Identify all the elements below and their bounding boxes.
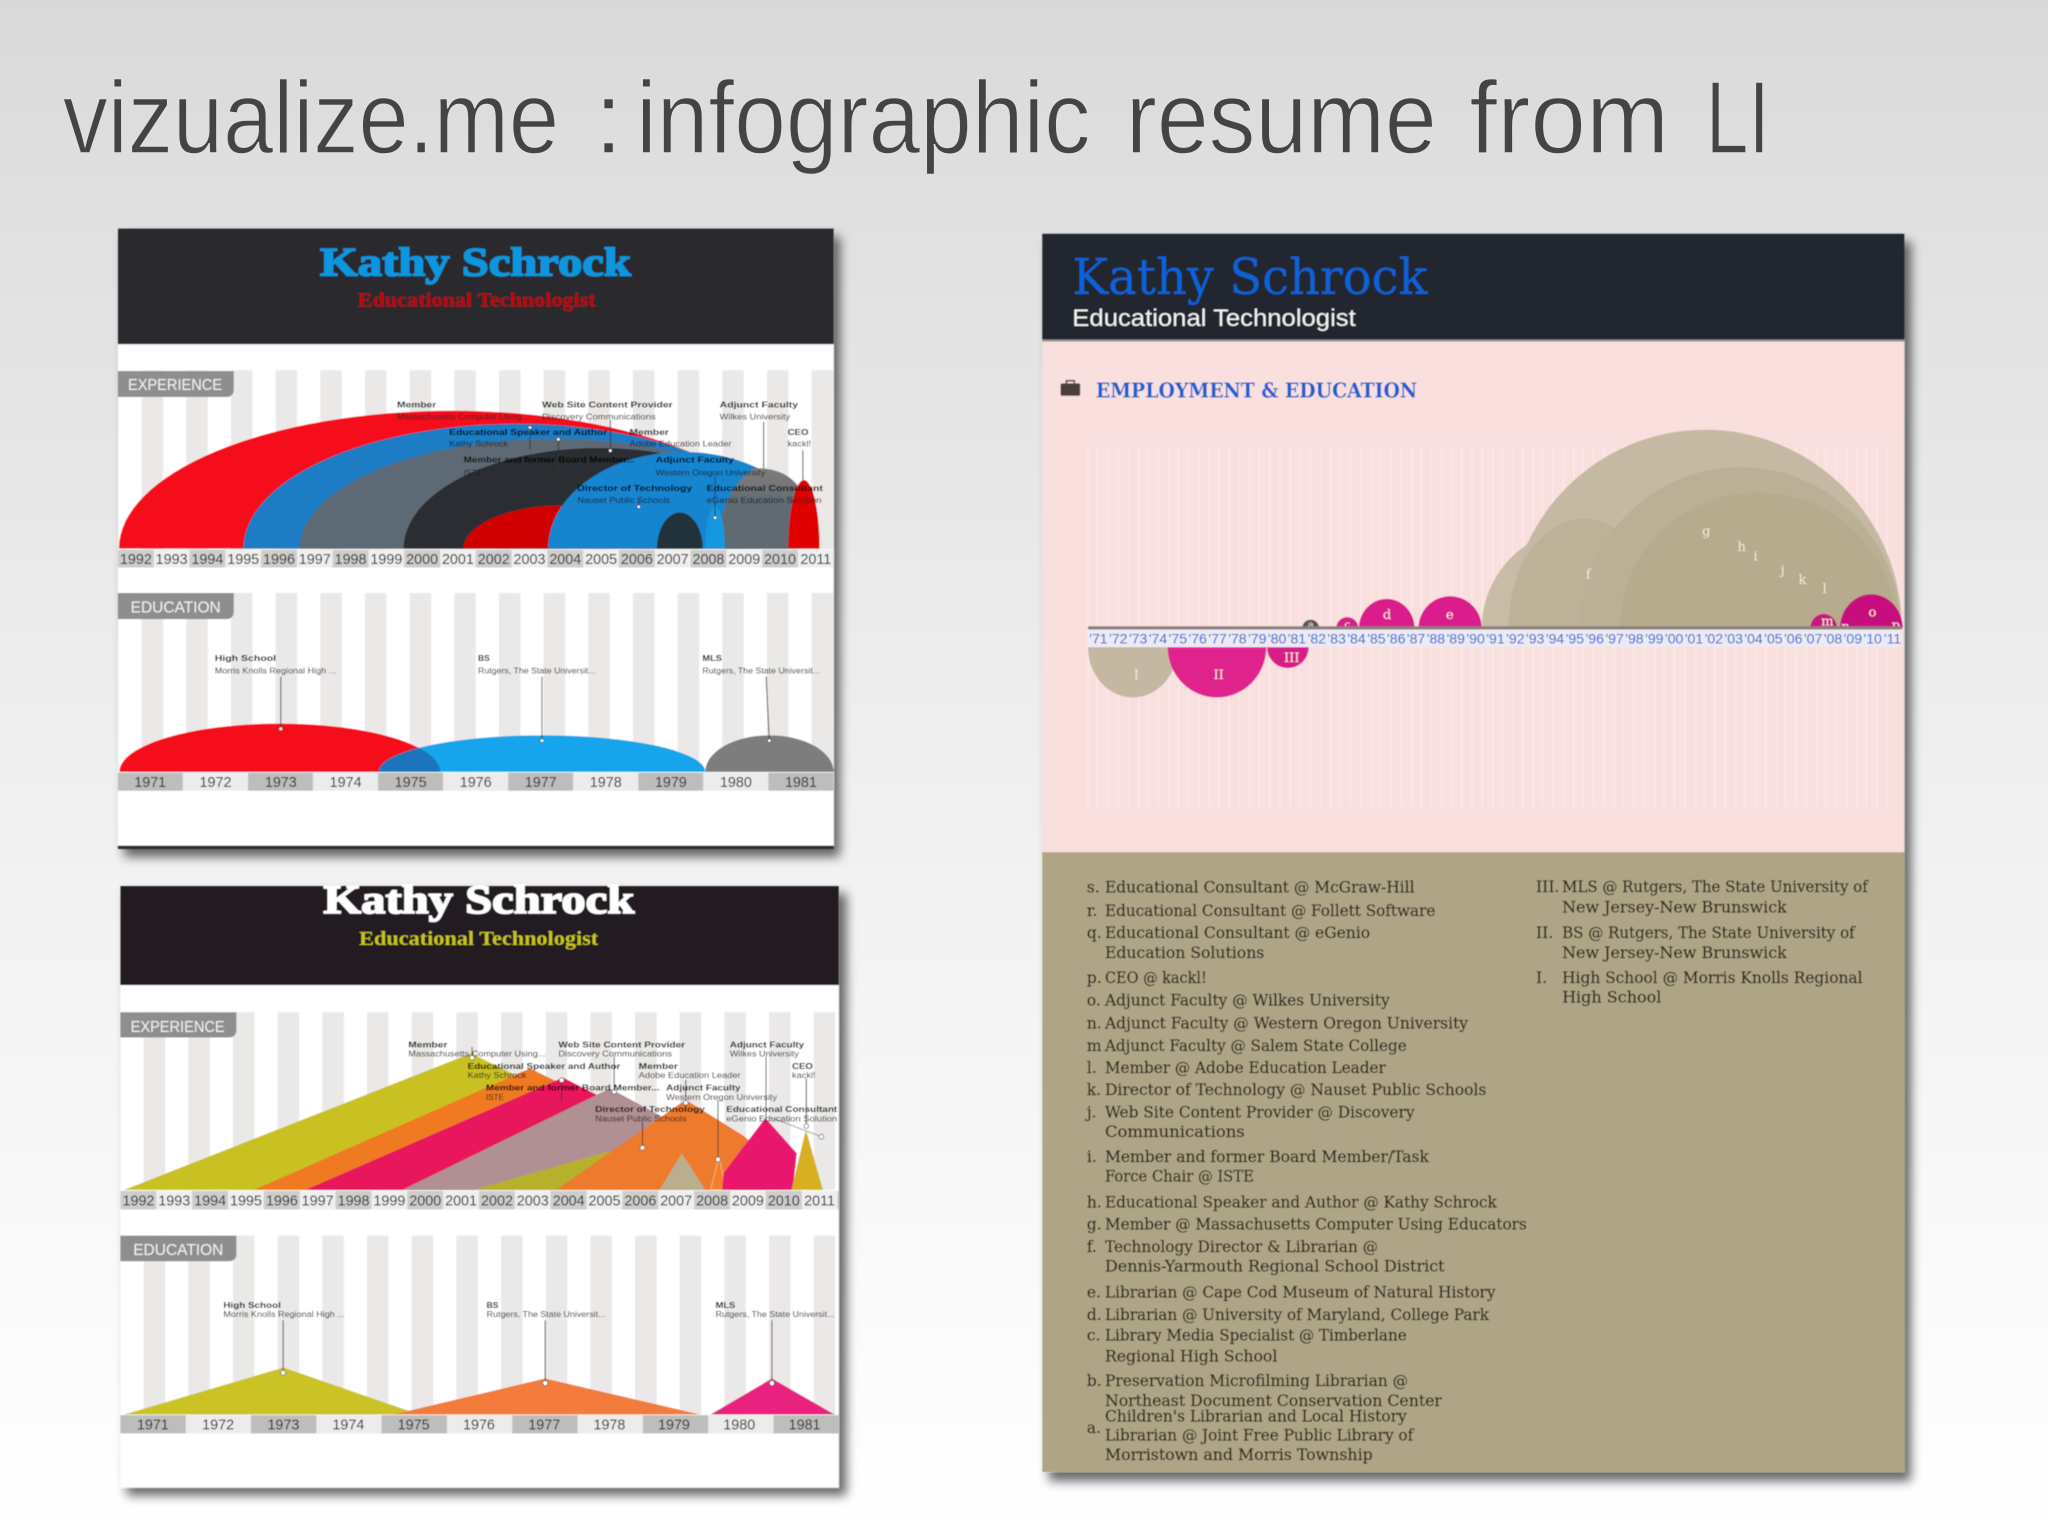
legend: employment list: Educational Consultant @ McGraw-Hill — [1105, 878, 1415, 897]
axis: experience years: 1998 — [338, 1194, 370, 1210]
legend: employment list: j. — [1085, 1102, 1097, 1121]
callouts: experience triangles: CEO — [792, 1061, 814, 1071]
axis: year timeline: '83 — [1327, 631, 1346, 647]
axis: year timeline: '08 — [1824, 631, 1842, 647]
tag: experience: EXPERIENCE — [128, 377, 222, 394]
callouts: experience arcs: ISTE — [464, 468, 483, 477]
header: arcs resume — [118, 229, 834, 344]
axis: experience years: 2000 — [409, 1194, 441, 1210]
callouts: education arcs: BS — [478, 653, 490, 663]
axis: year timeline: '95 — [1566, 631, 1584, 647]
chart: employment bubbles: f — [1586, 568, 1592, 583]
callouts: experience triangles: Western Oregon University — [666, 1093, 778, 1102]
legend: employment list: Librarian @ Cape Cod Museum of Natural History — [1105, 1283, 1496, 1302]
legend: employment list: p. — [1087, 968, 1102, 987]
legend: education list: III. — [1536, 877, 1560, 896]
chart: employment bubbles: e — [1446, 608, 1454, 623]
callouts: education triangles — [223, 1300, 834, 1386]
legend: education list: New Jersey-New Brunswick — [1562, 943, 1787, 962]
tag: experience: EXPERIENCE — [131, 1019, 225, 1036]
axis: year timeline: '98 — [1625, 631, 1644, 647]
axis: education years: 1971 — [134, 775, 166, 791]
axis: experience years: 1997 — [302, 1194, 334, 1210]
callouts: experience arcs: Adjunct Faculty — [720, 400, 798, 410]
tag: experience — [118, 371, 234, 397]
axis: year timeline: '81 — [1288, 631, 1306, 647]
axis: year timeline: '02 — [1705, 631, 1723, 647]
callouts: experience triangles: Adobe Education Leader — [639, 1071, 741, 1080]
tag: education: EDUCATION — [133, 1242, 223, 1259]
chart: employment bubbles: l — [1823, 582, 1827, 597]
legend: employment list: Preservation Microfilming Librarian @ — [1105, 1371, 1408, 1390]
axis: education years: 1976 — [463, 1418, 495, 1434]
year grid — [1088, 445, 1887, 807]
callouts: education arcs: Rutgers, The State Universit... — [478, 666, 596, 675]
chart: education bubbles: I — [1134, 668, 1139, 683]
axis: year timeline: '87 — [1407, 631, 1425, 647]
axis: year timeline: '93 — [1526, 631, 1545, 647]
axis: year timeline: '96 — [1586, 631, 1604, 647]
axis: education years: 1972 — [202, 1418, 234, 1434]
axis: education years: 1973 — [267, 1418, 299, 1434]
axis: experience years: 2007 — [660, 1194, 692, 1210]
axis: education years: 1981 — [785, 775, 817, 791]
legend: employment list: c. — [1087, 1326, 1100, 1345]
axis: year timeline: '84 — [1347, 631, 1366, 647]
legend: employment list: Children's Librarian and Local History — [1105, 1407, 1407, 1426]
legend: employment list: Web Site Content Provider @ Discovery — [1105, 1102, 1415, 1121]
callouts: experience triangles: Adjunct Faculty — [730, 1040, 805, 1050]
axis: year timeline: '85 — [1367, 631, 1386, 647]
legend: employment list: Member and former Board Member/Task — [1105, 1147, 1429, 1166]
legend: employment list: Dennis-Yarmouth Regional School District — [1105, 1257, 1445, 1276]
axis: year timeline: '82 — [1308, 631, 1326, 647]
axis: education years: 1978 — [593, 1418, 625, 1434]
chart: employment bubbles: m — [1821, 615, 1834, 630]
callouts: experience triangles: Wilkes University — [730, 1050, 800, 1059]
legend: employment list: Member @ Massachusetts Computer Using Educators — [1105, 1215, 1527, 1234]
axis: experience years: 1992 — [120, 552, 152, 568]
callouts: experience arcs: Educational Speaker and Author — [449, 427, 608, 437]
callouts: education triangles: High School — [223, 1300, 281, 1310]
axis: experience years: 2010 — [764, 552, 796, 568]
title: LI — [1706, 60, 1770, 175]
axis: year timeline: '79 — [1248, 631, 1267, 647]
legend: employment list: q. — [1087, 923, 1102, 942]
legend: employment list: Educational Consultant @ Follett Software — [1105, 901, 1435, 920]
callouts: experience arcs: Member and former Board Member... — [464, 454, 635, 464]
callouts: experience triangles: eGenio Education Solution — [726, 1114, 837, 1123]
legend: employment list: Education Solutions — [1105, 943, 1264, 962]
axis: experience years: 1994 — [191, 552, 223, 568]
axis: experience years: 2005 — [588, 1194, 620, 1210]
legend: employment list: Adjunct Faculty @ Wilkes University — [1104, 991, 1390, 1010]
legend: employment list: o. — [1087, 991, 1101, 1010]
callouts: experience triangles: Kathy Schrock — [468, 1071, 527, 1080]
axis: experience years: 2001 — [445, 1194, 477, 1210]
axis: year timeline: '73 — [1129, 631, 1147, 647]
axis: experience years: 2002 — [478, 552, 510, 568]
legend: employment list: k. — [1087, 1080, 1101, 1099]
callouts: experience triangles: Massachusetts Computer Using... — [408, 1050, 545, 1059]
legend: education list: MLS @ Rutgers, The State University of — [1562, 877, 1869, 896]
callouts: experience arcs: Member — [397, 400, 437, 410]
legend: employment list: m — [1087, 1036, 1102, 1055]
callouts: experience arcs: Western Oregon University — [656, 468, 766, 477]
header: triangles resume: Kathy Schrock — [323, 877, 635, 922]
axis: year timeline: '71 — [1089, 631, 1108, 647]
chart: experience triangles — [120, 1012, 839, 1190]
axis: experience years: 2006 — [624, 1194, 656, 1210]
legend: education list — [1536, 877, 1869, 1006]
callouts: education triangles: Rutgers, The State Universit... — [487, 1310, 606, 1319]
axis: year timeline: '07 — [1804, 631, 1823, 647]
axis: education years: 1975 — [398, 1418, 430, 1434]
legend: employment list: b. — [1087, 1371, 1102, 1390]
axis: year timeline: '72 — [1109, 631, 1128, 647]
callouts: experience triangles: Adjunct Faculty — [666, 1083, 741, 1093]
legend: education list: II. — [1536, 923, 1553, 942]
legend: employment list: Director of Technology @ Nauset Public Schools — [1105, 1080, 1486, 1099]
axis: experience years: 2006 — [621, 552, 653, 568]
axis: experience years: 1992 — [122, 1194, 154, 1210]
axis: experience years — [118, 550, 834, 568]
axis: experience years: 2009 — [728, 552, 760, 568]
axis: year timeline: '90 — [1466, 631, 1485, 647]
axis: year timeline: '88 — [1427, 631, 1445, 647]
legend: employment list: Regional High School — [1105, 1347, 1277, 1366]
axis: experience years: 2008 — [696, 1194, 728, 1210]
axis: experience years — [120, 1191, 839, 1210]
header: bubble resume: Kathy Schrock — [1072, 248, 1428, 306]
callouts: experience arcs: kackl! — [788, 440, 811, 449]
callouts: experience triangles — [408, 1040, 837, 1162]
callouts: experience triangles: Discovery Communications — [558, 1050, 672, 1059]
header: bubble resume — [1042, 234, 1904, 342]
axis: year timeline — [1088, 626, 1902, 647]
header: arcs resume: Educational Technologist — [358, 289, 596, 311]
chart: employment bubbles: j — [1779, 564, 1785, 579]
axis: education years: 1971 — [137, 1418, 169, 1434]
callouts: experience arcs — [397, 400, 823, 519]
chart: employment bubbles: k — [1798, 573, 1806, 588]
callouts: experience arcs: Adjunct Faculty — [656, 454, 734, 464]
panel: arcs resume — [118, 229, 840, 857]
legend: employment list: f. — [1087, 1237, 1097, 1256]
chart: education bubbles — [1088, 647, 1309, 697]
legend: employment list: Member @ Adobe Education Leader — [1105, 1058, 1386, 1077]
callouts: education triangles: BS — [487, 1300, 499, 1310]
chart: employment bubbles: n — [1841, 620, 1850, 635]
axis: experience years: 2004 — [553, 1194, 585, 1210]
axis: experience years: 2011 — [800, 552, 831, 568]
legend: employment list: l. — [1087, 1058, 1097, 1077]
legend: employment list: Librarian @ Joint Free Public Library of — [1105, 1426, 1414, 1445]
callouts: experience triangles: Member — [639, 1061, 679, 1071]
axis: experience years: 2004 — [549, 552, 581, 568]
callouts: experience arcs: Web Site Content Provider — [542, 400, 674, 410]
legend: education list: I. — [1536, 968, 1547, 987]
callouts: education arcs: High School — [215, 653, 276, 663]
callouts: experience arcs: Wilkes University — [720, 412, 791, 421]
axis: experience years: 2010 — [768, 1194, 800, 1210]
chart: education bubbles: II — [1213, 668, 1224, 683]
callouts: experience arcs: Educational Consultant — [707, 483, 823, 493]
axis: education years: 1978 — [590, 775, 622, 791]
axis: experience years: 2011 — [804, 1194, 835, 1210]
legend: employment list: a. — [1087, 1418, 1101, 1437]
tag: education: EDUCATION — [131, 600, 221, 617]
axis: education years: 1981 — [789, 1418, 821, 1434]
title: infographic — [636, 60, 1091, 175]
header: arcs resume: Kathy Schrock — [320, 240, 631, 285]
legend: employment list: Technology Director & Librarian @ — [1105, 1237, 1378, 1256]
axis: year timeline: '11 — [1884, 631, 1901, 647]
axis: experience years: 1999 — [370, 552, 402, 568]
axis: experience years: 1994 — [194, 1194, 226, 1210]
axis: education years: 1980 — [723, 1418, 755, 1434]
callouts: experience triangles: kackl! — [792, 1071, 816, 1080]
axis: year timeline: '94 — [1546, 631, 1564, 647]
axis: year timeline: '92 — [1506, 631, 1525, 647]
axis: experience years: 2007 — [657, 552, 689, 568]
axis: experience years: 2000 — [406, 552, 438, 568]
title: from — [1469, 60, 1669, 175]
title: vizualize.me — [63, 60, 559, 175]
axis: year timeline: '77 — [1208, 631, 1227, 647]
axis: education years: 1979 — [655, 775, 687, 791]
legend: employment list: Communications — [1105, 1122, 1245, 1141]
callouts: experience arcs: Member — [630, 427, 670, 437]
title: resume — [1126, 60, 1437, 175]
chart: employment bubbles: p — [1892, 619, 1900, 634]
callouts: experience triangles: Web Site Content Provider — [558, 1040, 686, 1050]
axis: year timeline: '04 — [1744, 631, 1763, 647]
legend: employment list: r. — [1087, 901, 1097, 920]
header: triangles resume: Educational Technologist — [359, 928, 598, 950]
callouts: experience arcs: Nauset Public Schools — [577, 496, 670, 505]
section heading: employment and education: EMPLOYMENT & EDUCATION — [1096, 379, 1417, 403]
axis: experience years: 1995 — [227, 552, 259, 568]
legend: education list: High School — [1562, 987, 1661, 1006]
axis: year timeline: '76 — [1189, 631, 1207, 647]
chart: employment bubbles: a — [1308, 619, 1314, 631]
callouts: experience triangles: Educational Consultant — [726, 1104, 837, 1114]
axis: education years: 1980 — [720, 775, 752, 791]
callouts: education arcs — [215, 653, 820, 742]
axis: year timeline: '74 — [1149, 631, 1167, 647]
axis: experience years: 1996 — [266, 1194, 298, 1210]
callouts: education arcs: MLS — [702, 653, 722, 663]
axis: education years: 1972 — [200, 775, 231, 791]
chart: education triangles — [120, 1236, 839, 1415]
axis: experience years: 1993 — [158, 1194, 190, 1210]
axis: education years: 1977 — [525, 775, 557, 791]
callouts: education triangles: Rutgers, The State Universit... — [716, 1310, 834, 1319]
callouts: experience triangles: Member — [408, 1040, 448, 1050]
callouts: experience arcs: eGenio Education Solution — [707, 496, 822, 505]
axis: year timeline: '97 — [1605, 631, 1624, 647]
legend: education list: High School @ Morris Knolls Regional — [1562, 968, 1863, 987]
chart: employment bubbles: c — [1344, 619, 1350, 631]
legend: employment list: Educational Speaker and Author @ Kathy Schrock — [1105, 1193, 1497, 1212]
chart: employment bubbles: i — [1753, 549, 1758, 564]
tag: experience — [120, 1012, 236, 1037]
title: : — [594, 60, 623, 175]
axis: education years: 1977 — [528, 1418, 560, 1434]
legend: employment list: h. — [1087, 1193, 1102, 1212]
axis: year timeline: '05 — [1764, 631, 1783, 647]
legend: employment list: s. — [1087, 878, 1100, 897]
axis: year timeline: '75 — [1169, 631, 1187, 647]
header: triangles resume — [120, 877, 839, 985]
legend: education list: New Jersey-New Brunswick — [1562, 897, 1787, 916]
callouts: experience arcs: Discovery Communications — [542, 412, 656, 421]
legend: employment list: e. — [1087, 1283, 1101, 1302]
axis: year timeline: '06 — [1784, 631, 1803, 647]
callouts: experience triangles: Nauset Public Schools — [595, 1114, 687, 1123]
callouts: education arcs: Rutgers, The State Universit... — [702, 666, 820, 675]
icon: briefcase — [1061, 381, 1080, 396]
legend: employment list: Educational Consultant @ eGenio — [1105, 923, 1370, 942]
legend: employment list: Northeast Document Conservation Center — [1105, 1391, 1442, 1410]
axis: year timeline: '91 — [1486, 631, 1505, 647]
legend panel — [1042, 852, 1904, 1472]
legend: education list: BS @ Rutgers, The State University of — [1562, 923, 1856, 942]
callouts: experience arcs: Massachusetts Computer Using... — [397, 412, 529, 421]
callouts: experience triangles: Member and former Board Member... — [486, 1083, 660, 1093]
tag: education — [120, 1236, 236, 1261]
callouts: experience arcs: Kathy Schrock — [449, 440, 509, 449]
chart: education arcs — [118, 593, 834, 772]
axis: education years: 1974 — [330, 775, 362, 791]
callouts: experience triangles: Educational Speaker and Author — [468, 1061, 621, 1071]
axis: experience years: 2003 — [517, 1194, 549, 1210]
callouts: experience arcs: Director of Technology — [577, 483, 693, 493]
axis: education years: 1976 — [460, 775, 492, 791]
callouts: education arcs: Morris Knolls Regional High ... — [215, 666, 336, 675]
callouts: experience triangles: ISTE — [486, 1093, 505, 1102]
tag: education — [118, 593, 234, 619]
legend: employment list: Adjunct Faculty @ Western Oregon University — [1104, 1014, 1468, 1033]
header: bubble resume: Educational Technologist — [1072, 305, 1356, 332]
panel: triangles resume — [120, 877, 846, 1496]
callouts: experience arcs: Adobe Education Leader — [630, 440, 732, 449]
chart: employment bubbles — [1302, 430, 1903, 635]
callouts: experience triangles: Director of Technology — [595, 1104, 705, 1114]
legend: employment list: i. — [1087, 1147, 1097, 1166]
legend: employment list: Librarian @ University of Maryland, College Park — [1105, 1305, 1489, 1324]
callouts: education triangles: MLS — [716, 1300, 736, 1310]
axis: experience years: 2003 — [514, 552, 545, 568]
chart: employment bubbles: d — [1383, 608, 1391, 623]
panel: bubble resume — [1042, 234, 1911, 1481]
axis: year timeline: '89 — [1447, 631, 1465, 647]
axis: education years: 1973 — [265, 775, 297, 791]
legend: employment list — [1085, 878, 1527, 1464]
legend: employment list: g. — [1087, 1215, 1102, 1234]
axis: education years: 1974 — [332, 1418, 364, 1434]
chart: employment bubbles: h — [1738, 540, 1747, 555]
axis: education years — [118, 773, 834, 791]
axis: year timeline: '00 — [1665, 631, 1684, 647]
axis: experience years: 2008 — [692, 552, 724, 568]
axis: experience years: 1999 — [373, 1194, 405, 1210]
axis: experience years: 2005 — [585, 552, 617, 568]
legend: employment list: d. — [1087, 1305, 1102, 1324]
axis: experience years: 1997 — [299, 552, 331, 568]
legend: employment list: CEO @ kackl! — [1105, 968, 1207, 987]
axis: year timeline: '78 — [1228, 631, 1247, 647]
chart: employment bubbles: g — [1702, 525, 1710, 540]
callouts: education triangles: Morris Knolls Regional High ... — [223, 1310, 345, 1319]
chart: employment bubbles: o — [1869, 605, 1877, 620]
legend: employment list: Morristown and Morris Township — [1105, 1445, 1373, 1464]
chart: education bubbles: III — [1284, 651, 1299, 666]
axis: year timeline: '03 — [1725, 631, 1743, 647]
axis: year timeline: '80 — [1268, 631, 1286, 647]
chart: experience arcs — [118, 370, 834, 549]
axis: year timeline: '10 — [1864, 631, 1882, 647]
axis: education years: 1975 — [395, 775, 427, 791]
axis: year timeline: '09 — [1844, 631, 1862, 647]
legend: employment list: Library Media Specialist @ Timberlane — [1105, 1326, 1407, 1345]
axis: experience years: 1995 — [230, 1194, 262, 1210]
axis: experience years: 2002 — [481, 1194, 513, 1210]
axis: experience years: 2009 — [732, 1194, 764, 1210]
callouts: experience arcs: CEO — [788, 427, 809, 437]
title — [63, 60, 1770, 175]
axis: experience years: 2001 — [442, 552, 474, 568]
axis: year timeline: '01 — [1685, 631, 1703, 647]
axis: education years: 1979 — [658, 1418, 690, 1434]
legend: employment list: Adjunct Faculty @ Salem State College — [1104, 1036, 1407, 1055]
axis: experience years: 1993 — [156, 552, 188, 568]
axis: experience years: 1998 — [335, 552, 367, 568]
axis: year timeline: '86 — [1387, 631, 1406, 647]
axis: year timeline: '99 — [1645, 631, 1664, 647]
axis: experience years: 1996 — [263, 552, 295, 568]
legend: employment list: Force Chair @ ISTE — [1105, 1166, 1254, 1185]
axis: education years — [120, 1415, 839, 1434]
legend: employment list: n. — [1087, 1014, 1102, 1033]
